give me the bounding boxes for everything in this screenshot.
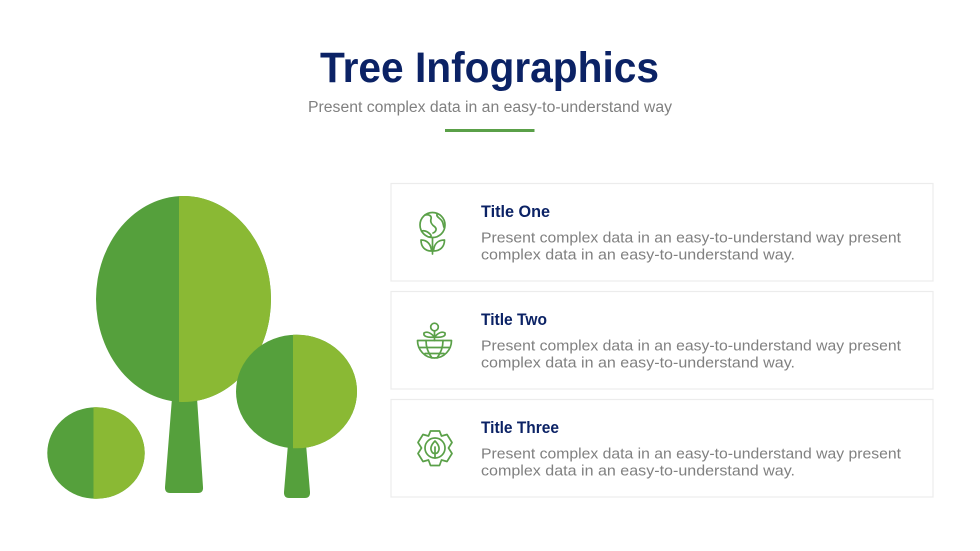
body text bbox=[481, 230, 902, 264]
body text bbox=[481, 446, 902, 480]
icon: globe flower bbox=[420, 212, 445, 254]
heading: Title One bbox=[481, 203, 550, 221]
heading: Title Three bbox=[481, 419, 559, 437]
body text: complex data in an easy-to-understand way. bbox=[481, 246, 795, 264]
title underline bbox=[445, 129, 534, 132]
icon: gear with leaf bbox=[418, 431, 452, 466]
body text: Present complex data in an easy-to-understand way present bbox=[481, 230, 902, 246]
heading: Title Two bbox=[481, 311, 547, 329]
body text: complex data in an easy-to-understand way. bbox=[481, 462, 795, 480]
body text: Present complex data in an easy-to-understand way present bbox=[481, 338, 902, 354]
panel: title three bbox=[391, 400, 933, 497]
body text: complex data in an easy-to-understand way. bbox=[481, 354, 795, 372]
panel: title two bbox=[391, 292, 933, 389]
medium tree bbox=[236, 335, 357, 498]
title: Tree Infographics bbox=[320, 44, 659, 92]
icon: globe bowl with sprout bbox=[418, 323, 452, 358]
subtitle: Present complex data in an easy-to-understand way bbox=[308, 99, 672, 116]
body text bbox=[481, 338, 902, 372]
large tree bbox=[96, 196, 271, 493]
small tree bbox=[47, 407, 145, 499]
body text: Present complex data in an easy-to-understand way present bbox=[481, 446, 902, 462]
panel: title one bbox=[391, 184, 933, 281]
